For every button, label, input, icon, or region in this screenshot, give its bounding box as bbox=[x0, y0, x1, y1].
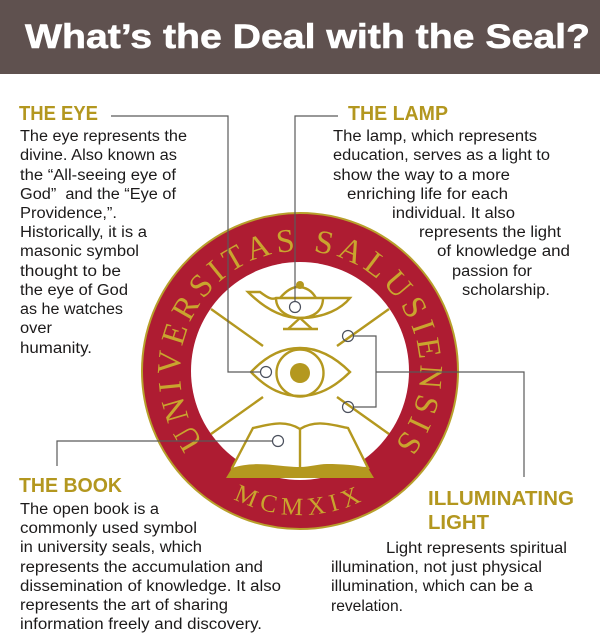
text block: the eye: humanity. bbox=[20, 340, 92, 357]
heading: the book: THE BOOK bbox=[19, 475, 123, 497]
icon: book bbox=[226, 423, 374, 478]
text block: the eye: as he watches bbox=[20, 301, 123, 318]
text block: the eye: masonic symbol bbox=[20, 243, 139, 260]
panel: the lamp bbox=[333, 103, 570, 299]
text block: the book: commonly used symbol bbox=[20, 520, 197, 537]
text block: the lamp: scholarship. bbox=[462, 282, 550, 299]
panel: illuminating light bbox=[331, 488, 574, 615]
seal year: MCMXIX bbox=[234, 484, 362, 516]
text block: the lamp: enriching life for each bbox=[347, 186, 508, 203]
text block: the lamp: passion for bbox=[452, 263, 532, 280]
title banner bbox=[0, 0, 600, 74]
text block: the lamp: individual. It also bbox=[392, 205, 515, 222]
title banner: What’s the Deal with the Seal? bbox=[25, 18, 590, 56]
heading: illuminating light: ILLUMINATING bbox=[428, 488, 574, 510]
white centre bbox=[191, 262, 409, 480]
text block: the eye: The eye represents the bbox=[20, 128, 187, 145]
text block: illuminating light bbox=[331, 540, 567, 615]
text block: the lamp: represents the light bbox=[419, 224, 562, 241]
text block: the book: information freely and discovery. bbox=[20, 616, 262, 633]
text block: the eye: over bbox=[20, 320, 52, 337]
heading: the lamp: THE LAMP bbox=[348, 103, 448, 125]
text block: illuminating light: illumination, which can be a bbox=[331, 578, 533, 595]
text block: the eye: Historically, it is a bbox=[20, 224, 147, 241]
text block: the eye: thought to be bbox=[20, 263, 121, 280]
panel: the book bbox=[19, 475, 281, 633]
text block: the eye: Providence,”. bbox=[20, 205, 117, 222]
red ring bbox=[142, 213, 458, 529]
text block: the lamp: education, serves as a light to bbox=[333, 147, 550, 164]
seal motto: UNIVERSITAS SALUSIENSIS bbox=[158, 230, 442, 454]
text block: the lamp: The lamp, which represents bbox=[333, 128, 537, 145]
text block: the lamp: of knowledge and bbox=[437, 243, 570, 260]
text block: the book bbox=[20, 501, 281, 633]
text block: the book: The open book is a bbox=[20, 501, 159, 518]
icon: eye bbox=[251, 348, 350, 396]
text block: the book: in university seals, which bbox=[20, 539, 202, 556]
text block: illuminating light: revelation. bbox=[331, 598, 403, 615]
light rays bbox=[211, 309, 389, 434]
icon: lamp bbox=[248, 281, 350, 329]
text block: the eye: God” and the “Eye of bbox=[20, 186, 177, 203]
text block: illuminating light: illumination, not just physical bbox=[331, 559, 542, 576]
text block: the book: represents the art of sharing bbox=[20, 597, 228, 614]
leader lines bbox=[57, 116, 524, 477]
panel: illuminating light: LIGHT bbox=[428, 512, 489, 534]
heading: the eye: THE EYE bbox=[19, 103, 98, 125]
text block: the eye: divine. Also known as bbox=[20, 147, 177, 164]
text block: the lamp: show the way to a more bbox=[333, 167, 510, 184]
text block: the eye: the “All-seeing eye of bbox=[20, 167, 177, 184]
text block: the book: represents the accumulation and bbox=[20, 559, 263, 576]
text block: the eye: the eye of God bbox=[20, 282, 128, 299]
seal bbox=[141, 212, 459, 530]
text block: the lamp bbox=[333, 128, 570, 299]
text block: the eye bbox=[20, 128, 187, 357]
panel: the eye bbox=[19, 103, 187, 357]
text block: the book: dissemination of knowledge. It also bbox=[20, 578, 281, 595]
text block: illuminating light: Light represents spiritual bbox=[386, 540, 567, 557]
